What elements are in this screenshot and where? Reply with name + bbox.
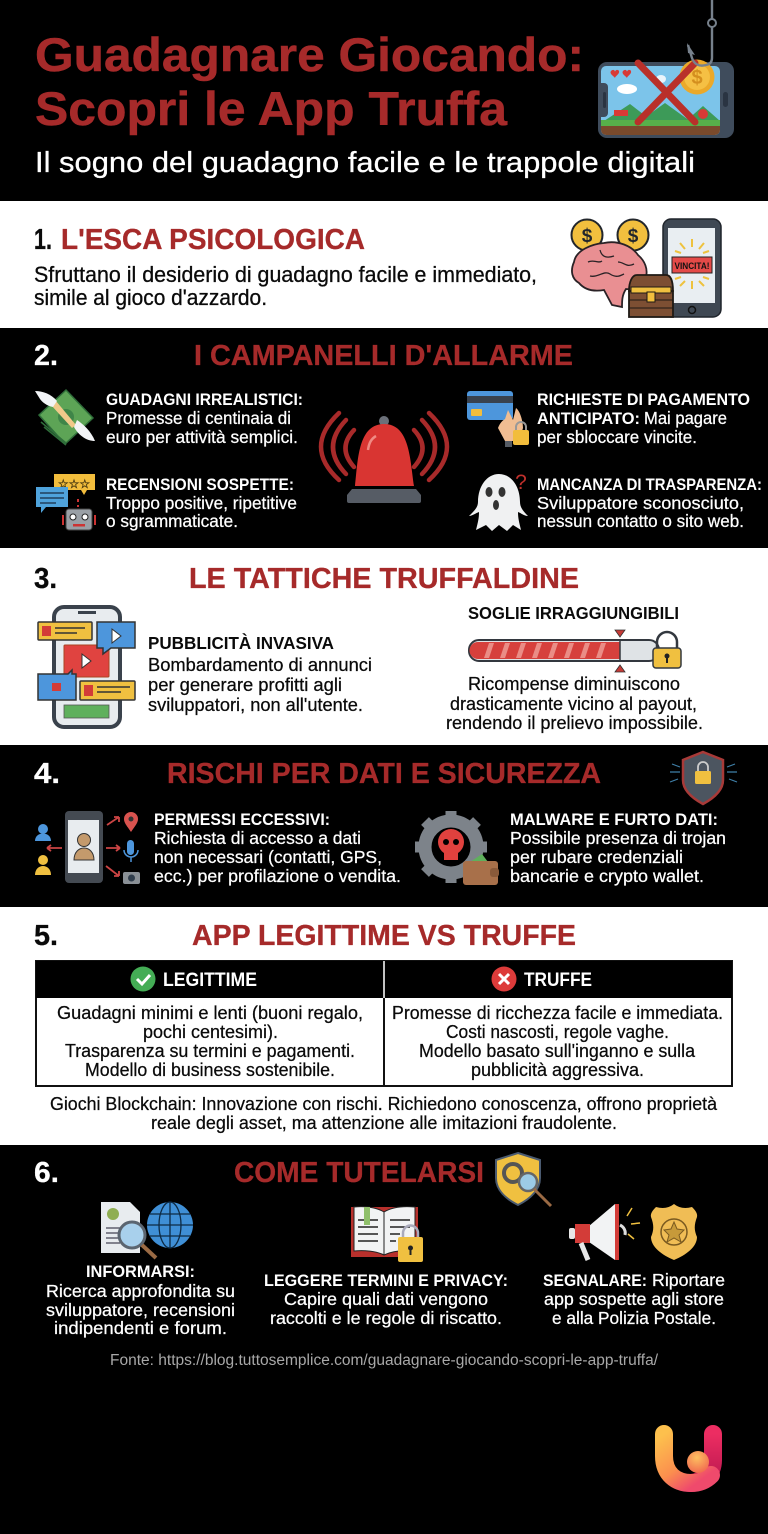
- panel: header: [0, 0, 768, 201]
- icon: alarm bell: [321, 413, 447, 503]
- section heading 3: 3.: [34, 563, 57, 595]
- text: sviluppatore, recensioni: [46, 1300, 235, 1320]
- cell: truffe: pubblicità aggressiva.: [471, 1060, 644, 1080]
- text: pubblicità invasiva: PUBBLICITÀ INVASIVA: [148, 632, 334, 653]
- text: e alla Polizia Postale.: [552, 1308, 716, 1328]
- icon: phone with ads: [38, 607, 135, 727]
- section heading 2: 2.: [34, 340, 58, 372]
- text: malware: per rubare credenziali: [510, 847, 683, 867]
- icon: flying money: [35, 390, 95, 445]
- icon: brain coins phone chest: VINCITA!: [674, 261, 710, 271]
- subtitle: Il sogno del guadagno facile e le trappole digitali: [35, 147, 695, 179]
- text block: [34, 262, 537, 310]
- icon: brain coins phone chest: $: [628, 226, 639, 247]
- icon: megaphone and police badge: [569, 1204, 697, 1260]
- text: malware: bancarie e crypto wallet.: [510, 866, 704, 886]
- icon: brain coins phone chest: $: [582, 226, 593, 247]
- header: truffe: TRUFFE: [524, 969, 592, 991]
- text: indipendenti e forum.: [54, 1318, 227, 1338]
- text: ANTICIPATO:: [537, 409, 640, 428]
- text: pubblicità invasiva: per generare profitti agli: [148, 675, 342, 695]
- title: Scopri le App Truffa: [35, 82, 508, 135]
- icon: phone permissions: [35, 811, 140, 884]
- cell: legittime: Trasparenza su termini e pagamenti.: [65, 1041, 355, 1061]
- text: raccolti e le regole di riscatto.: [270, 1308, 502, 1328]
- section heading 4: RISCHI PER DATI E SICUREZZA: [167, 758, 601, 790]
- heading: soglie irraggiungibili: SOGLIE IRRAGGIUNGIBILI: [468, 603, 679, 623]
- icon: book with lock: [351, 1207, 423, 1262]
- text: ricompense: rendendo il prelievo impossibile.: [446, 713, 703, 733]
- text: o sgrammaticate.: [106, 511, 238, 531]
- note: giochi blockchain: [50, 1094, 718, 1133]
- text: SEGNALARE:: [543, 1271, 647, 1290]
- section heading 1: L'ESCA PSICOLOGICA: [61, 224, 365, 256]
- cell: legittime: pochi centesimi).: [143, 1022, 278, 1042]
- text: pubblicità invasiva: Bombardamento di annunci: [148, 655, 372, 675]
- note: giochi blockchain: reale degli asset, ma attenzione alle imitazioni fraudolente.: [151, 1113, 617, 1133]
- text: ricompense: [446, 674, 703, 733]
- header: truffe: [492, 966, 592, 992]
- item: mancanza di trasparenza: [469, 471, 762, 531]
- text: Mai pagare: [644, 408, 727, 428]
- text block: simile al gioco d'azzardo.: [34, 285, 267, 310]
- chart: progress bar with lock: [469, 630, 681, 672]
- text: LEGGERE TERMINI E PRIVACY:: [264, 1271, 508, 1290]
- text: [537, 475, 762, 531]
- text: malware: [510, 810, 726, 886]
- section heading 5: [34, 920, 576, 952]
- icon: hooked game phone: [598, 0, 734, 138]
- logo: [664, 1434, 713, 1483]
- item: richieste di pagamento: [467, 390, 750, 447]
- panel: app legittime vs truffe: [0, 907, 768, 1145]
- icon: card and hand: [467, 391, 529, 447]
- icon: brain coins phone chest: [572, 219, 721, 317]
- text: ricompense: Ricompense diminuiscono: [468, 674, 680, 694]
- text: permessi eccessivi: Richiesta di accesso a dati: [154, 828, 361, 848]
- text: Sviluppatore sconosciuto,: [537, 493, 744, 513]
- panel: esca psicologica: [0, 201, 768, 328]
- column: informarsi: [46, 1202, 235, 1338]
- text: euro per attività semplici.: [106, 427, 298, 447]
- text: [106, 390, 303, 447]
- header: legittime: [130, 966, 257, 992]
- text: ricompense: drasticamente vicino al payout,: [450, 694, 697, 714]
- column: leggere termini: [264, 1207, 508, 1328]
- section heading 3: LE TATTICHE TRUFFALDINE: [189, 563, 579, 595]
- icon: ghost: [469, 471, 528, 531]
- cell: truffe: [392, 1003, 723, 1080]
- text: app sospette agli store: [544, 1289, 724, 1309]
- source line: Fonte: https://blog.tuttosemplice.com/guadagnare-giocando-scopri-le-app-truffa/: [110, 1352, 659, 1369]
- text: pubblicità invasiva: [148, 632, 372, 715]
- panel: rischi dati e sicurezza: [0, 745, 768, 907]
- icon: fake reviews: [36, 474, 95, 530]
- text: RICHIESTE DI PAGAMENTO: [537, 390, 750, 409]
- cell: truffe: Costi nascosti, regole vaghe.: [446, 1022, 669, 1042]
- section heading 6: [34, 1157, 484, 1189]
- text: nessun contatto o sito web.: [537, 511, 744, 531]
- column: segnalare: [543, 1204, 725, 1328]
- section heading 2: [34, 340, 573, 372]
- text: Promesse di centinaia di: [106, 408, 291, 428]
- icon: hooked game phone: $: [691, 67, 703, 89]
- cell: legittime: [57, 1003, 363, 1080]
- text: per sbloccare vincite.: [537, 427, 697, 447]
- icon: fake reviews: ☆☆☆: [58, 477, 90, 491]
- text block: Sfruttano il desiderio di guadagno facile e immediato,: [34, 262, 537, 287]
- section heading 6: 6.: [34, 1157, 59, 1189]
- text: permessi eccessivi: ecc.) per profilazione o vendita.: [154, 866, 401, 886]
- text: pubblicità invasiva: sviluppatori, non all'utente.: [148, 695, 363, 715]
- text: GUADAGNI IRREALISTICI:: [106, 390, 303, 409]
- text: Capire quali dati vengono: [284, 1289, 488, 1309]
- text: [543, 1270, 725, 1328]
- panel: campanelli d'allarme: [0, 328, 768, 548]
- text: malware: Possibile presenza di trojan: [510, 828, 726, 848]
- panel: tattiche truffaldine: [0, 548, 768, 745]
- panel: come tutelarsi: [0, 1145, 768, 1534]
- item: guadagni irrealistici: [35, 390, 303, 447]
- text: [537, 390, 750, 447]
- cell: truffe: Modello basato sull'inganno e sulla: [419, 1041, 696, 1061]
- title: Guadagnare Giocando:: [35, 28, 584, 81]
- text: [106, 475, 297, 531]
- cell: legittime: Guadagni minimi e lenti (buoni regalo,: [57, 1003, 363, 1023]
- cell: legittime: Modello di business sostenibile.: [85, 1060, 335, 1080]
- text: permessi eccessivi: PERMESSI ECCESSIVI:: [154, 810, 330, 829]
- text: permessi eccessivi: non necessari (contatti, GPS,: [154, 847, 382, 867]
- text: Riportare: [652, 1270, 725, 1290]
- icon: malware gear and wallet: [415, 811, 499, 885]
- cell: truffe: Promesse di ricchezza facile e immediata.: [392, 1003, 723, 1023]
- section heading 2: I CAMPANELLI D'ALLARME: [194, 340, 573, 372]
- section heading 4: 4.: [34, 758, 60, 790]
- icon: cracked shield: [670, 752, 737, 804]
- title: [35, 28, 584, 135]
- text: Ricerca approfondita su: [46, 1281, 235, 1301]
- text: malware: MALWARE E FURTO DATI:: [510, 810, 718, 829]
- comparison table: [36, 961, 732, 1086]
- item: recensioni sospette: [36, 474, 297, 531]
- text: [264, 1271, 508, 1328]
- icon: shield with magnifier: [496, 1153, 551, 1206]
- note: giochi blockchain: Giochi Blockchain: Innovazione con rischi. Richiedono conoscenza, offrono proprietà: [50, 1094, 718, 1114]
- text: RECENSIONI SOSPETTE:: [106, 475, 294, 494]
- text: Troppo positive, ripetitive: [106, 493, 297, 513]
- icon: ghost: ?: [515, 471, 527, 494]
- icon: document and globe: [101, 1202, 193, 1258]
- section heading 1: 1.: [34, 224, 52, 256]
- text: [46, 1262, 235, 1338]
- text: INFORMARSI:: [86, 1262, 195, 1281]
- text: permessi eccessivi: [154, 810, 401, 886]
- section heading 6: COME TUTELARSI: [234, 1157, 484, 1189]
- section heading 5: APP LEGITTIME VS TRUFFE: [192, 920, 576, 952]
- header: legittime: LEGITTIME: [163, 969, 257, 991]
- section heading 5: 5.: [34, 920, 58, 952]
